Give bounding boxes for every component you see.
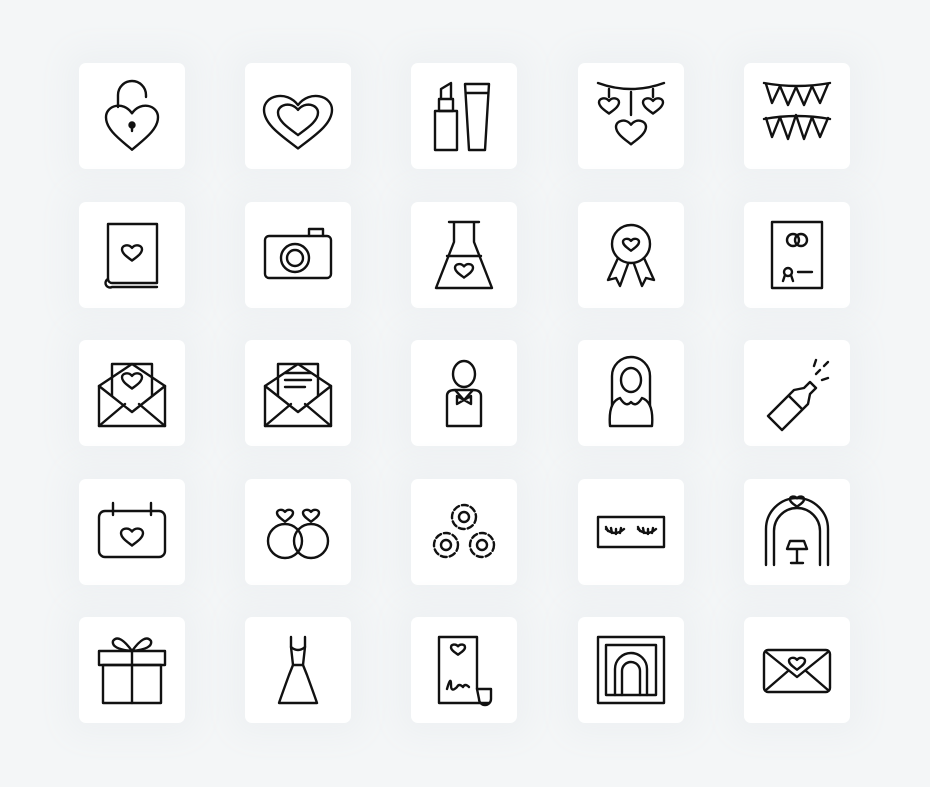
card: dress [245, 617, 351, 723]
card: rings [245, 479, 351, 585]
card: double heart [245, 63, 351, 169]
card: champagne [744, 340, 850, 446]
icon: heart garland [598, 83, 664, 144]
icon: flowers [434, 505, 494, 557]
card: bunting [744, 63, 850, 169]
card: heart garland [578, 63, 684, 169]
card: vows [411, 617, 517, 723]
icon: heart book [106, 224, 157, 287]
icon: award ribbon [608, 225, 654, 286]
icon: bride [610, 357, 652, 426]
icon: framed arch picture [598, 637, 664, 703]
icon: gift box [99, 639, 165, 703]
icon: flask with heart [436, 222, 492, 288]
card: flask [411, 202, 517, 308]
icon: wedding arch [766, 497, 828, 565]
card: envelope [744, 617, 850, 723]
card: lipstick [411, 63, 517, 169]
card: bride [578, 340, 684, 446]
card: book [79, 202, 185, 308]
card: framed picture [578, 617, 684, 723]
card: calendar [79, 479, 185, 585]
icon: calendar heart [99, 503, 165, 557]
icon: champagne bottle [768, 360, 828, 430]
icon: heart lock [106, 81, 158, 150]
icon: camera [265, 229, 331, 278]
card: certificate [744, 202, 850, 308]
card: award [578, 202, 684, 308]
card: eyelashes [578, 479, 684, 585]
card: arch [744, 479, 850, 585]
icon: wedding rings [268, 510, 328, 558]
icon: envelope heart [764, 650, 830, 692]
icon: marriage certificate [772, 222, 822, 288]
icon: double heart [264, 96, 332, 148]
card: groom [411, 340, 517, 446]
card: camera [245, 202, 351, 308]
icon: wedding dress [279, 637, 317, 703]
card: flowers [411, 479, 517, 585]
icon: eyelashes [598, 517, 664, 547]
icon: lipstick and tube [435, 83, 489, 150]
card: gift [79, 617, 185, 723]
card: love letter [79, 340, 185, 446]
card: heart lock [79, 63, 185, 169]
icon: open envelope heart [99, 364, 165, 426]
icon: bunting flags [764, 83, 830, 139]
icon: signed document [439, 637, 491, 705]
card: letter [245, 340, 351, 446]
icon: open envelope letter [265, 364, 331, 426]
icon: groom [447, 361, 481, 426]
